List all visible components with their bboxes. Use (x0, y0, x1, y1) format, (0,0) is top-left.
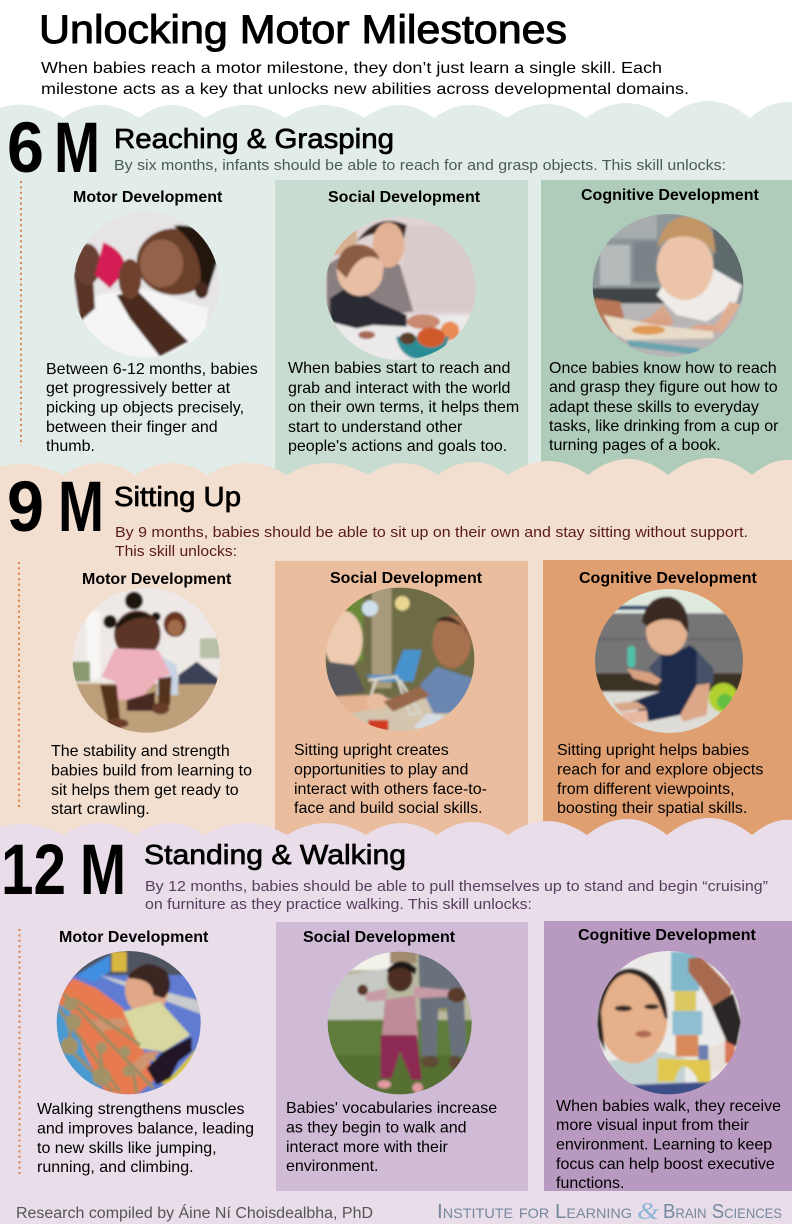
cognitive text: from different viewpoints, (557, 781, 735, 798)
intro text: When babies reach a motor milestone, they don’t just learn a single skill. Each (41, 60, 662, 77)
social text: Babies' vocabularies increase (286, 1100, 497, 1117)
social text: When babies start to reach and (288, 360, 510, 377)
panel: 9 months section (0, 458, 792, 841)
column: cognitive development: Cognitive Development (581, 187, 759, 204)
age label 12 M: 12 (1, 831, 66, 910)
age label 9 M: M (58, 468, 104, 547)
section background scalloped (0, 458, 792, 840)
motor text: picking up objects precisely, (46, 400, 244, 416)
cognitive text: tasks, like drinking from a cup or (549, 418, 779, 435)
column: motor development (46, 189, 258, 455)
column: social development (288, 189, 519, 455)
social text: opportunities to play and (294, 762, 468, 778)
column: social development: Social Development (328, 189, 481, 206)
section background scalloped (0, 818, 792, 1224)
title: Unlocking Motor Milestones (39, 8, 567, 52)
photo: baby holding red toy (74, 222, 218, 358)
panel: cognitive background (541, 180, 792, 480)
cognitive text: and grasp they figure out how to (549, 379, 778, 396)
motor text (46, 361, 258, 455)
age label 6 M (7, 109, 100, 188)
motor text: running, and climbing. (37, 1159, 194, 1176)
footer credit: Research compiled by Áine Ní Choisdealbha, PhD (16, 1205, 373, 1222)
motor text: sit helps them get ready to (51, 782, 239, 799)
motor text: and improves balance, leading (37, 1120, 254, 1138)
column: cognitive development (557, 570, 763, 817)
section description: By 12 months, babies should be able to pull themselves up to stand and begin “cruising” (145, 879, 768, 895)
cognitive text (549, 360, 779, 454)
cognitive text (557, 742, 763, 817)
social text: people's actions and goals too. (288, 438, 507, 455)
cognitive text: environment. Learning to keep (556, 1136, 772, 1154)
cognitive text: more visual input from their (556, 1117, 750, 1134)
panel: 6 months section (0, 101, 792, 480)
motor text: start crawling. (51, 801, 150, 818)
section description: on furniture as they practice walking. This skill unlocks: (145, 897, 532, 913)
institute logo wordmark: Brain Sciences (663, 1201, 782, 1223)
motor text: between their finger and (46, 419, 218, 436)
institute logo wordmark (437, 1199, 782, 1224)
motor text: babies build from learning to (51, 762, 252, 780)
column: motor development: Motor Development (59, 929, 209, 946)
panel: social background (275, 561, 528, 841)
dotted timeline (20, 181, 22, 446)
photo: baby crawling on rug (70, 585, 223, 737)
cognitive text: Sitting upright helps babies (557, 742, 749, 759)
section description (145, 879, 768, 913)
cognitive text: functions. (556, 1175, 624, 1192)
motor text (37, 1101, 254, 1176)
social text: face and build social skills. (294, 800, 483, 817)
dotted timeline (18, 929, 20, 1175)
motor text (51, 743, 252, 818)
cognitive text: boosting their spatial skills. (557, 800, 747, 817)
photo: baby looking at a book (590, 212, 747, 360)
social text: as they begin to walk and (286, 1120, 467, 1136)
social text: environment. (286, 1158, 378, 1175)
motor text: Between 6-12 months, babies (46, 361, 258, 378)
intro text (41, 60, 689, 98)
age label 9 M (7, 468, 104, 547)
social text (286, 1100, 497, 1175)
column: motor development (37, 929, 254, 1176)
column: social development (286, 929, 497, 1175)
panel: social background (275, 180, 528, 480)
photo: two babies holding hands (323, 585, 477, 735)
column: motor development (51, 571, 252, 818)
panel: 12 months section (0, 818, 792, 1224)
section description (115, 525, 748, 560)
photo: toddler walking on grass (325, 950, 475, 1097)
social text: on their own terms, it helps them (288, 399, 519, 416)
intro text: milestone acts as a key that unlocks new abilities across developmental domains. (41, 81, 689, 98)
heading: reaching and grasping: Reaching & Grasping (114, 123, 394, 154)
age label 6 M: 6 (7, 109, 44, 188)
motor text: thumb. (46, 438, 95, 455)
cognitive text (556, 1098, 781, 1192)
dotted timeline (18, 562, 20, 808)
photo: baby sitting with teal toy (593, 587, 747, 735)
motor text: The stability and strength (51, 743, 230, 760)
motor text: get progressively better at (46, 380, 231, 397)
column: social development (294, 570, 487, 817)
cognitive text: Once babies know how to reach (549, 360, 777, 377)
social text (294, 742, 487, 817)
motor text: to new skills like jumping, (37, 1140, 217, 1157)
column: cognitive development (556, 927, 781, 1192)
column: cognitive development (549, 187, 779, 454)
column: motor development: Motor Development (82, 571, 232, 588)
cognitive text: reach for and explore objects (557, 762, 763, 778)
age label 9 M: 9 (7, 468, 44, 547)
social text: Sitting upright creates (294, 742, 449, 759)
social text: interact more with their (286, 1139, 449, 1156)
institute logo wordmark: Institute for Learning (437, 1201, 632, 1223)
cognitive text: focus can help boost executive (556, 1156, 775, 1173)
panel: cognitive background (543, 560, 792, 841)
column: cognitive development: Cognitive Development (579, 570, 757, 587)
age label 6 M: M (54, 109, 100, 188)
section background scalloped (0, 101, 792, 480)
section description: By six months, infants should be able to reach for and grasp objects. This skill unlocks: (114, 158, 726, 174)
column: social development: Social Development (330, 570, 483, 587)
age label 12 M: M (80, 831, 126, 910)
column: social development: Social Development (303, 929, 456, 946)
section description: By 9 months, babies should be able to sit up on their own and stay sitting without support. (115, 525, 748, 541)
heading: sitting up: Sitting Up (114, 481, 241, 512)
age label 12 M (1, 831, 126, 910)
motor text: Walking strengthens muscles (37, 1101, 244, 1118)
cognitive text: adapt these skills to everyday (549, 399, 759, 416)
heading: standing and walking: Standing & Walking (144, 839, 406, 870)
panel: cognitive background (544, 921, 792, 1191)
social text: start to understand other (288, 419, 463, 436)
cognitive text: When babies walk, they receive (556, 1098, 781, 1115)
photo: child stacking blocks (595, 948, 743, 1097)
photo: baby climbing rope net (55, 948, 203, 1097)
column: motor development: Motor Development (73, 189, 223, 206)
social text (288, 360, 519, 455)
section description: This skill unlocks: (115, 544, 237, 560)
social text: interact with others face-to- (294, 781, 487, 798)
panel: social background (276, 922, 528, 1191)
cognitive text: turning pages of a book. (549, 437, 721, 454)
photo: baby and mother reaching for fruit (325, 216, 476, 360)
social text: grab and interact with the world (288, 380, 510, 397)
column: cognitive development: Cognitive Development (578, 927, 756, 944)
